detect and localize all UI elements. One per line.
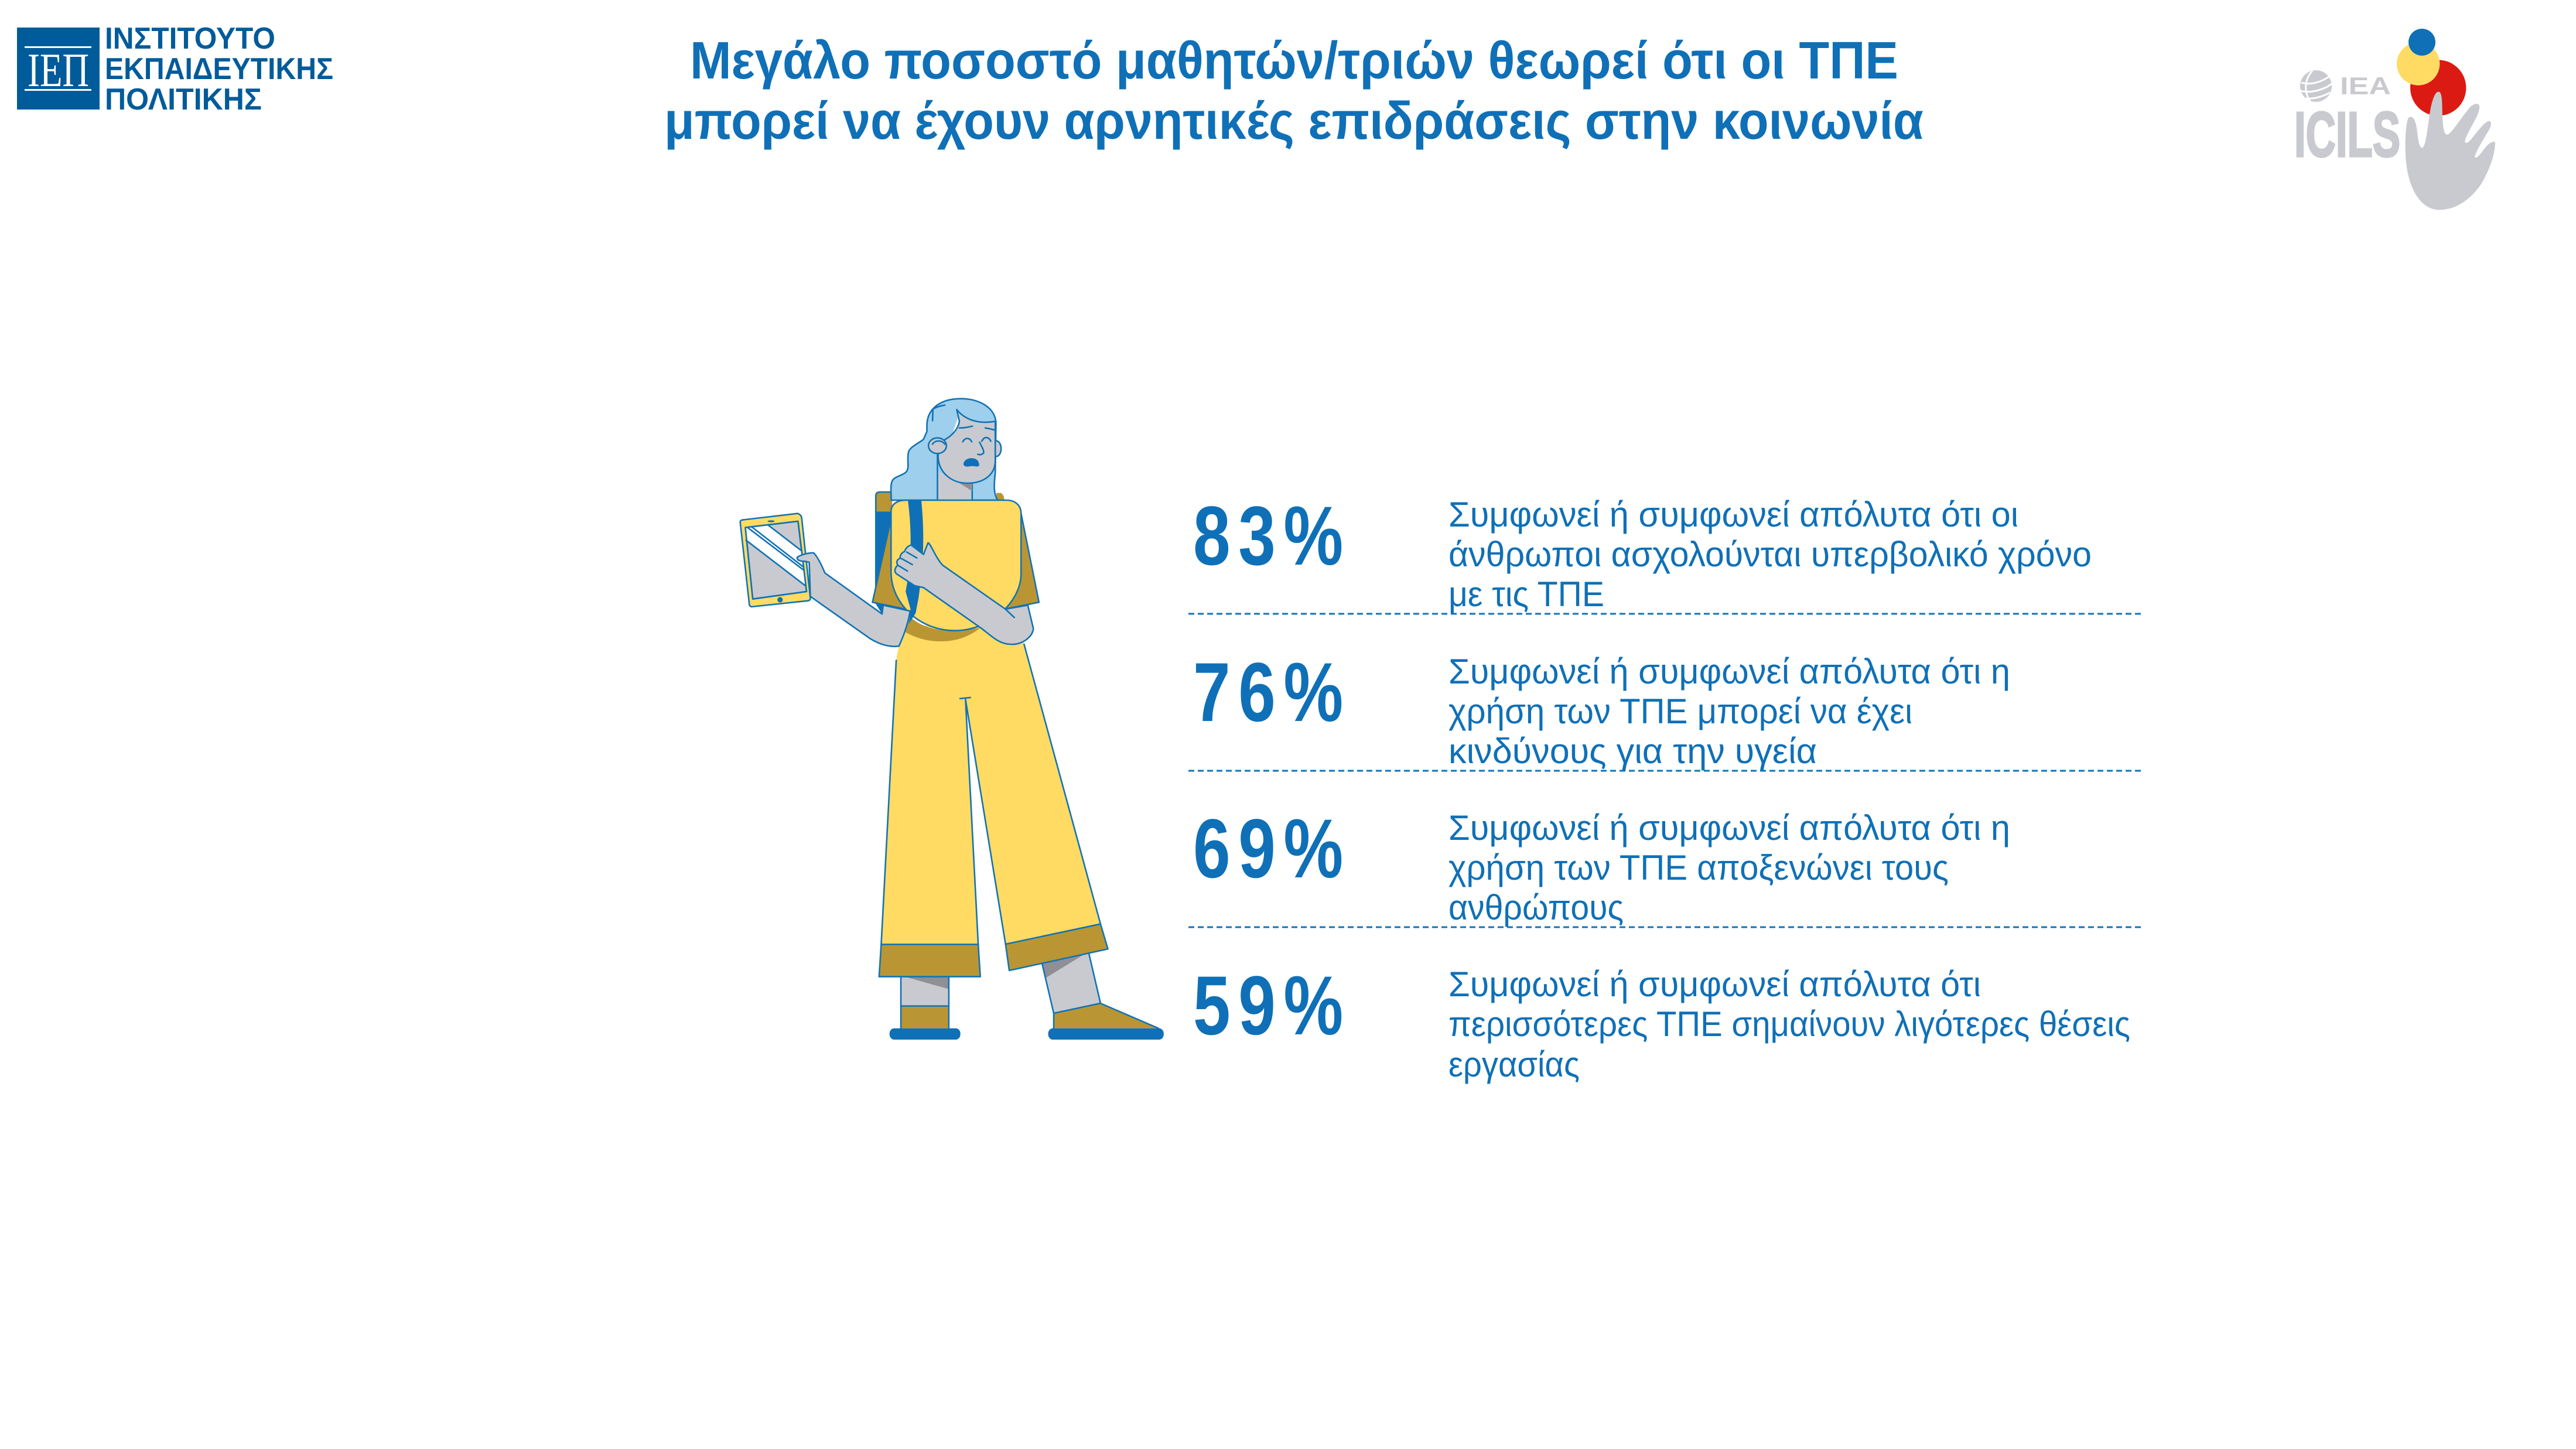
trousers (881, 626, 1101, 944)
left ear (928, 438, 947, 453)
inner ear (932, 441, 945, 444)
logo emblem: ΙΕΠ (28, 43, 89, 97)
tablet screen (746, 521, 807, 599)
left sleeve (873, 520, 908, 609)
illustration: girl with tablet (740, 399, 1164, 1040)
trousers and feet (879, 626, 1164, 1040)
description: Συμφωνεί ή συμφωνεί απόλυτα ότι η (1448, 652, 2010, 691)
left cuff (879, 944, 980, 977)
tablet reflection lines (746, 521, 807, 599)
IEA globe (2300, 70, 2332, 102)
value 69%: 69% (1193, 802, 1351, 896)
tablet body (740, 514, 811, 607)
description (1448, 965, 2130, 1084)
strap (906, 500, 923, 624)
hand (2406, 92, 2495, 210)
description: άνθρωποι ασχολούνται υπερβολικό χρόνο (1448, 535, 2092, 574)
description: περισσότερες ΤΠΕ σημαίνουν λιγότερες θέσεις (1448, 1004, 2130, 1044)
description: χρήση των ΤΠΕ αποξενώνει τους (1448, 848, 1949, 887)
right sleeve (1005, 514, 1039, 609)
backpack front (891, 500, 1021, 631)
upper body (740, 399, 1039, 647)
row: 69% (1193, 802, 2010, 927)
description (1448, 652, 2010, 771)
neck (938, 473, 972, 500)
backpack blue panel (875, 511, 892, 614)
description: εργασίας (1448, 1045, 1580, 1084)
tablet (740, 514, 811, 607)
description: χρήση των ΤΠΕ μπορεί να έχει (1448, 692, 1912, 731)
row: 83% (1193, 490, 2092, 614)
description: ανθρώπους (1448, 888, 1624, 927)
left arm (797, 553, 910, 647)
description: Συμφωνεί ή συμφωνεί απόλυτα ότι η (1448, 808, 2010, 847)
title (664, 32, 1924, 151)
eyebrows and eyes (959, 426, 994, 442)
right cuff (1006, 924, 1108, 970)
right ear (991, 441, 1001, 456)
right ankle shadow (1042, 955, 1083, 978)
belt shadow (904, 617, 980, 641)
title: μπορεί να έχουν αρνητικές επιδράσεις στην κοινωνία (664, 92, 1924, 151)
yellow circle (2397, 42, 2440, 86)
title: Μεγάλο ποσοστό μαθητών/τριών θεωρεί ότι οι ΤΠΕ (690, 32, 1898, 90)
logo emblem (17, 28, 100, 110)
logo wordmark (105, 22, 333, 117)
description: με τις ΤΠΕ (1448, 575, 1604, 614)
ICILS text: ICILS (2294, 99, 2400, 170)
face (938, 409, 995, 483)
description: Συμφωνεί ή συμφωνεί απόλυτα ότι οι (1448, 495, 2018, 534)
mouth (964, 458, 979, 467)
hair strand (932, 405, 945, 421)
hair (891, 399, 997, 500)
left ankle (901, 977, 949, 1006)
fingers (898, 552, 1014, 617)
left ankle shadow (905, 977, 949, 989)
description: Συμφωνεί ή συμφωνεί απόλυτα ότι (1448, 965, 1981, 1004)
left ankle outline (901, 977, 949, 1028)
IEA text: IEA (2340, 72, 2391, 100)
description (1448, 495, 2092, 614)
value 59%: 59% (1193, 959, 1351, 1052)
value 76%: 76% (1193, 646, 1351, 739)
logo wordmark: ΙΝΣΤΙΤΟΥΤΟ (105, 22, 275, 56)
right shoe outline (1054, 1003, 1159, 1028)
row: 76% (1193, 646, 2010, 771)
backpack top (876, 492, 1005, 511)
white hair highlight (953, 414, 990, 433)
trousers outline (881, 644, 1101, 944)
nose (978, 442, 983, 454)
row: 59% (1193, 959, 2130, 1084)
logo wordmark: ΕΚΠΑΙΔΕΥΤΙΚΗΣ (105, 52, 333, 86)
logo wordmark: ΠΟΛΙΤΙΚΗΣ (105, 83, 262, 117)
right arm (895, 543, 1033, 644)
logo: IEA ICILS (2294, 29, 2495, 210)
right sole (1048, 1028, 1164, 1040)
right shoe (1054, 1003, 1159, 1028)
neck outline (938, 455, 972, 500)
right ankle outline (1042, 954, 1101, 1013)
left shoe (901, 1006, 949, 1028)
tablet reflection (746, 525, 805, 586)
neck shadow (959, 483, 972, 491)
tablet home button (777, 597, 783, 603)
logo: Institute of Educational Policy (17, 22, 333, 117)
value 83%: 83% (1193, 490, 1351, 583)
description (1448, 808, 2010, 927)
right ankle (1042, 954, 1101, 1013)
description: κινδύνους για την υγεία (1448, 732, 1817, 771)
blue circle (2408, 29, 2435, 56)
left sole (890, 1028, 961, 1040)
backpack outline (876, 492, 892, 602)
red circle (2410, 60, 2466, 116)
tablet speaker (767, 520, 775, 522)
